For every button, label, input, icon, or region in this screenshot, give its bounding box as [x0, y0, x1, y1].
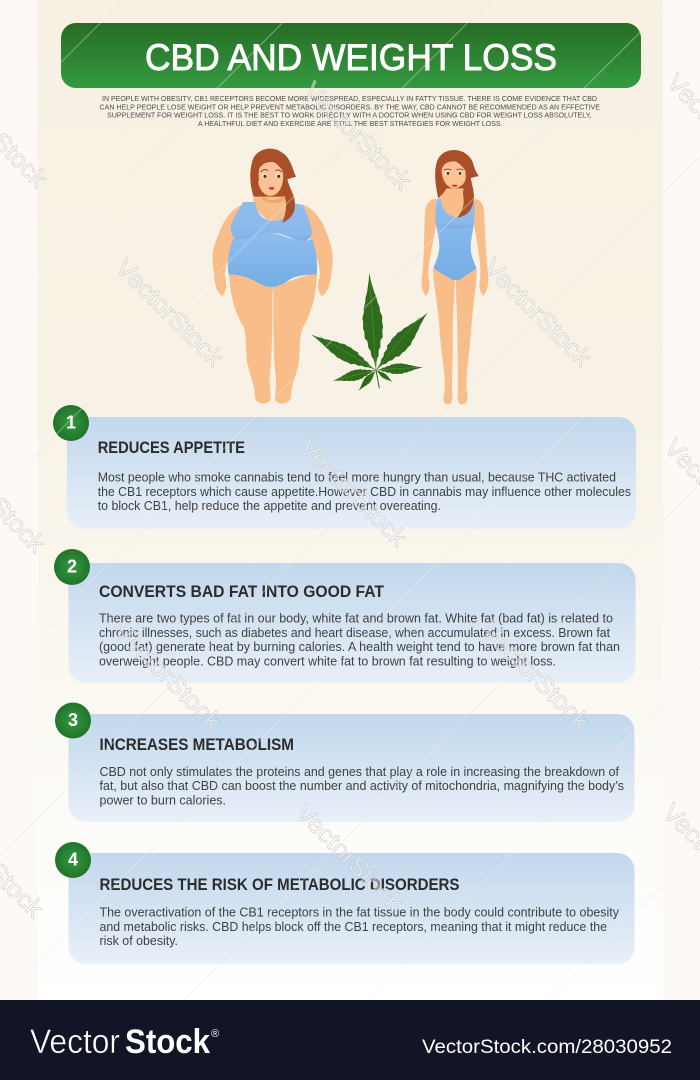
body 3: power to burn calories.: [100, 792, 226, 807]
intro text: CAN HELP PEOPLE LOSE WEIGHT OR HELP PREVENT METABOLIC DISORDERS. BY THE WAY, CBD CANNOT BE RECOMMENDED AS AN EFFECTIVE: [100, 102, 600, 111]
neck and chest: [253, 197, 296, 222]
footer logo: Vector: [30, 1023, 120, 1061]
eyes and mouth: [445, 171, 450, 175]
body 2: There are two types of fat in our body, white fat and brown fat. White fat (bad fat) is related to: [99, 611, 613, 626]
face: [442, 161, 466, 188]
body 2: chronic illnesses, such as diabetes and heart disease, when accumulated in excess. Brown fat: [99, 625, 610, 640]
watermarks: VectorStock: [290, 798, 409, 918]
badge 3: 3: [68, 710, 78, 730]
body 2: (good fat) generate heat by burning calories. A health weight tend to have more brown fat than: [99, 639, 620, 654]
watermarks: VectorStock: [478, 253, 597, 373]
footer bar: [0, 1000, 700, 1080]
panel 1: reduces appetite: [53, 405, 636, 529]
badge 3: [55, 702, 91, 738]
panel 2: converts bad fat into good fat: [54, 549, 636, 683]
body 4: risk of obesity.: [100, 933, 178, 948]
heading 4: REDUCES THE RISK OF METABOLIC DISORDERS: [100, 876, 460, 894]
hair back: [435, 150, 479, 218]
icon: cannabis leaf: [307, 272, 434, 393]
face: [258, 162, 283, 196]
hair back: [250, 149, 296, 223]
badge 1: [53, 405, 89, 441]
footer id: VectorStock.com/28030952: [422, 1036, 672, 1058]
badge 2: [54, 549, 90, 585]
body 3: CBD not only stimulates the proteins and genes that play a role in increasing the breakdown of: [100, 764, 619, 779]
watermarks: VectorStock: [298, 76, 417, 196]
watermarks: VectorStock: [294, 433, 413, 553]
neck and chest: [438, 188, 473, 218]
hair strand: [457, 177, 474, 218]
illustration: overweight woman: [213, 149, 333, 404]
illustration: slim woman: [422, 150, 488, 404]
heading 2: CONVERTS BAD FAT INTO GOOD FAT: [99, 583, 384, 601]
badge 2: 2: [67, 556, 77, 576]
body 4: [100, 905, 619, 948]
badge 4: 4: [68, 850, 78, 870]
intro text: IN PEOPLE WITH OBESITY, CB1 RECEPTORS BECOME MORE WIDESPREAD, ESPECIALLY IN FATTY TISSUE. THERE IS COME EVIDENCE THAT CBD: [102, 94, 597, 103]
badge 4: [55, 842, 91, 878]
watermarks: VectorStock: [476, 616, 595, 736]
badge 1: 1: [66, 412, 76, 432]
watermarks: [0, 68, 700, 924]
watermarks: VectorStock: [110, 253, 229, 373]
body 3: [100, 764, 624, 807]
arms: [213, 204, 245, 296]
legs: [433, 268, 455, 404]
body 3: fat, but also that CBD can boost the number and activity of mitochondria, magnifying the body’s: [100, 778, 624, 793]
arms: [422, 199, 437, 296]
body 1: the CB1 receptors which cause appetite.However CBD in cannabis may influence other molecules: [98, 484, 631, 499]
swimsuit: [433, 199, 476, 280]
title banner: CBD AND WEIGHT LOSS: [145, 37, 557, 78]
swimsuit top: [231, 202, 312, 242]
hair fringe: [255, 150, 296, 182]
panel 3: increases metabolism: [55, 702, 634, 822]
panel 4: reduces the risk of metabolic disorders: [55, 842, 634, 964]
body 4: and metabolic risks. CBD helps block off the CB1 receptors, meaning that it might reduce the: [100, 919, 607, 934]
body 2: [99, 611, 620, 668]
heading 3: INCREASES METABOLISM: [100, 736, 294, 754]
heading 1: REDUCES APPETITE: [98, 439, 245, 457]
hair strand: [282, 180, 295, 223]
body 4: The overactivation of the CB1 receptors in the fat tissue in the body could contribute to obesity: [100, 905, 619, 920]
legs: [229, 272, 273, 404]
intro text: A HEALTHFUL DIET AND EXERCISE ARE STILL THE BEST STRATEGIES FOR WEIGHT LOSS.: [198, 119, 502, 128]
swimsuit belly: [228, 233, 317, 287]
body 1: [98, 470, 631, 513]
intro text: SUPPLEMENT FOR WEIGHT LOSS. IT IS THE BEST TO WORK DIRECTLY WITH A DOCTOR WHEN USING CBD FOR WEIGHT LOSS ABSOLUTELY,: [107, 111, 592, 120]
footer logo: Stock: [125, 1023, 210, 1061]
footer logo: ®: [211, 1028, 219, 1040]
footer logo: [30, 1023, 219, 1061]
hair fringe: [437, 150, 479, 180]
eyes and mouth: [262, 174, 267, 178]
body 1: Most people who smoke cannabis tend to feel more hungry than usual, because THC activated: [98, 470, 616, 485]
watermarks: VectorStock: [108, 616, 227, 736]
intro text: [100, 94, 600, 128]
body 1: to block CB1, help reduce the appetite and prevent overeating.: [98, 498, 441, 513]
body 2: overweight people. CBD may convert white fat to brown fat resulting to weight loss.: [99, 653, 556, 668]
title banner: [61, 23, 641, 88]
